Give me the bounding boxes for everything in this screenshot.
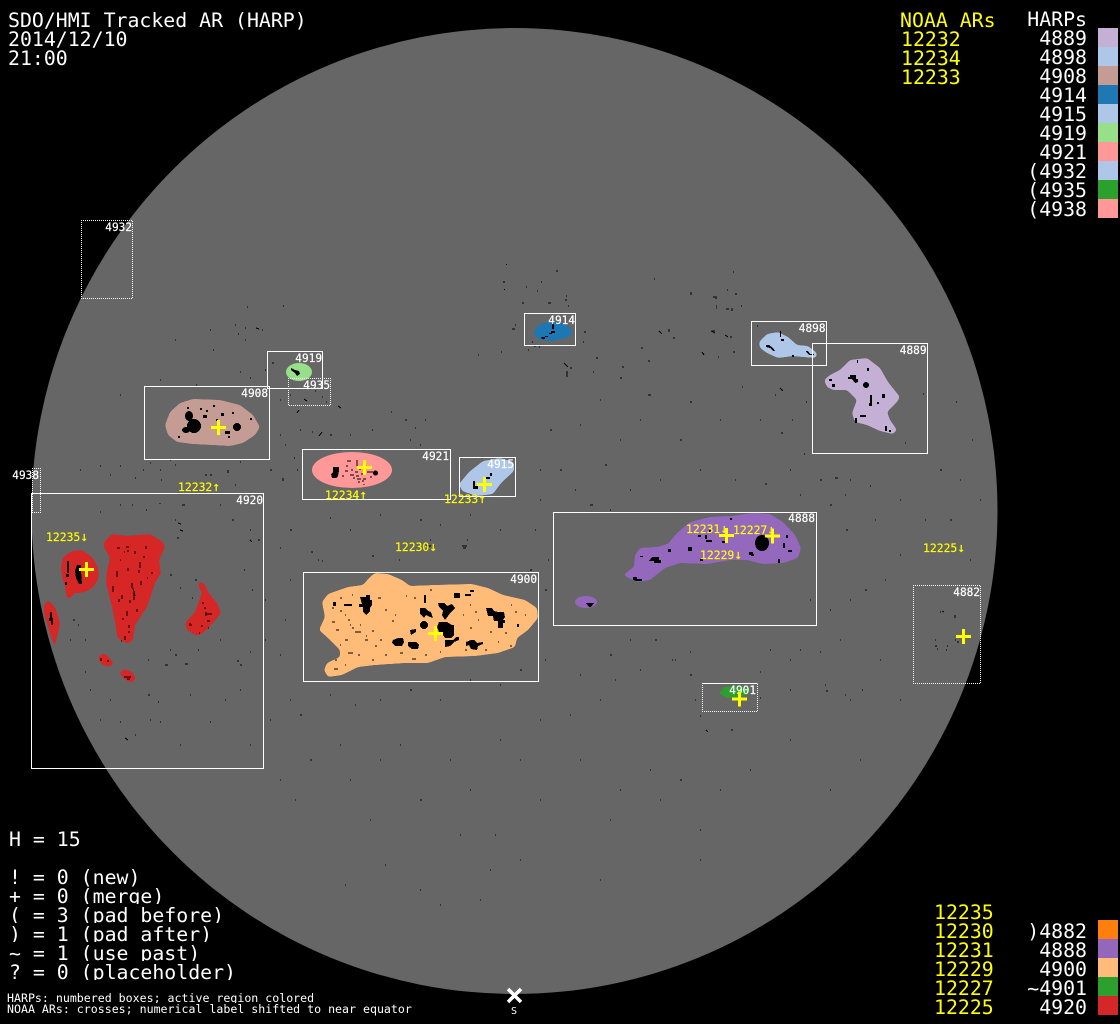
panel: HARP 4919 bbox=[286, 363, 312, 381]
label: 4882: 4882 bbox=[953, 586, 980, 599]
bottom legend: HARPs: 4900 bbox=[1039, 958, 1087, 981]
panel: HARP 4898 bbox=[759, 331, 817, 358]
box: HARP 4898 bbox=[752, 322, 826, 366]
bottom legend: NOAA ARs: 12230 bbox=[934, 920, 994, 943]
panel: HARP 4920 region bbox=[44, 534, 221, 683]
box: HARP 4938 bbox=[32, 468, 40, 512]
box: HARP 4935 bbox=[288, 378, 330, 406]
NOAA AR label: 12231: 12231↓ bbox=[686, 522, 728, 537]
cross: AR in 4900 bbox=[428, 626, 443, 641]
NOAA AR label: 12235: 12235↓ bbox=[46, 530, 88, 545]
label: 4938: 4938 bbox=[12, 469, 39, 482]
NOAA AR label: 12225: 12225↓ bbox=[923, 541, 965, 556]
NOAA AR label: 12227: 12227↓ bbox=[733, 523, 775, 538]
box: HARP 4932 bbox=[82, 220, 132, 298]
label: 4921: 4921 bbox=[422, 450, 449, 463]
label: 4935: 4935 bbox=[303, 379, 330, 392]
top legend: HARPs: 4915 bbox=[1039, 103, 1087, 126]
cross: AR in 4908 bbox=[211, 420, 226, 435]
panel: HARP 4915 bbox=[459, 458, 514, 496]
title block: 2014/12/10 bbox=[8, 28, 127, 51]
box: HARP 4921 bbox=[302, 450, 450, 500]
panel: HARP 4914 bbox=[533, 322, 572, 341]
scattered magnetic specks bbox=[70, 264, 981, 905]
bottom legend: NOAA ARs: 12235 bbox=[934, 901, 994, 924]
label: 4901: 4901 bbox=[729, 684, 756, 697]
status flag counts: ( = 3 (pad before) bbox=[9, 904, 224, 927]
bottom legend: HARPs: ~4901 bbox=[1027, 977, 1087, 1000]
panel: HARP 4889 bbox=[824, 358, 900, 434]
box: HARP 4915 bbox=[460, 458, 516, 496]
NOAA AR label: 12230: 12230↓ bbox=[395, 540, 437, 555]
label: 4932: 4932 bbox=[105, 221, 132, 234]
box: HARP 4901 bbox=[702, 684, 758, 712]
bottom legend: NOAA ARs: 12229 bbox=[934, 958, 994, 981]
cross: AR in 4882 bbox=[956, 629, 971, 644]
top legend: HARPs: HARPs bbox=[1027, 8, 1087, 31]
box: HARP 4908 bbox=[144, 386, 270, 460]
footnote: HARPs: numbered boxes; active region colored bbox=[7, 991, 314, 1005]
label: 4900: 4900 bbox=[510, 573, 537, 586]
bottom legend: NOAA ARs: 12231 bbox=[934, 939, 994, 962]
top legend: HARPs: 4921 bbox=[1039, 141, 1087, 164]
bottom legend: HARPs bbox=[1027, 920, 1087, 1019]
label: 4889: 4889 bbox=[900, 344, 926, 357]
NOAA AR label: 12232: 12232↑ bbox=[178, 480, 220, 495]
footnote: NOAA ARs: crosses; numerical label shifted to near equator bbox=[7, 1002, 412, 1016]
bottom legend: HARPs: )4882 bbox=[1027, 920, 1087, 943]
label: 4888: 4888 bbox=[788, 512, 815, 525]
top legend: HARPs: 4889 bbox=[1039, 27, 1087, 50]
footnote bbox=[7, 991, 412, 1016]
box: HARP 4889 bbox=[812, 344, 928, 454]
label: 4908: 4908 bbox=[241, 387, 268, 400]
count: H = 15: H = 15 bbox=[9, 828, 81, 851]
cross: AR 12235 position bbox=[79, 562, 94, 577]
panel: HARP 4900 bbox=[319, 573, 538, 677]
title block: 21:00 bbox=[8, 47, 68, 70]
bottom legend: NOAA ARs bbox=[934, 901, 994, 1019]
top legend: HARPs: (4935 bbox=[1027, 179, 1087, 202]
top legend: HARPs: 4914 bbox=[1039, 84, 1087, 107]
box: HARP 4882 bbox=[914, 586, 980, 684]
label: S: S bbox=[511, 1006, 517, 1017]
red active region patches bbox=[44, 534, 221, 683]
bottom legend: HARPs: 4888 bbox=[1039, 939, 1087, 962]
cross: AR in 4901 bbox=[732, 692, 747, 706]
top legend: NOAA ARs: 12234 bbox=[901, 47, 961, 70]
bottom legend: NOAA ARs: 12225 bbox=[934, 996, 994, 1019]
status flag counts: + = 0 (merge) bbox=[9, 885, 164, 908]
top legend: HARPs: 4898 bbox=[1039, 46, 1087, 69]
cross: AR in 4915 bbox=[477, 477, 492, 492]
status flag counts: ? = 0 (placeholder) bbox=[9, 961, 236, 984]
top legend: NOAA ARs: 12232 bbox=[901, 28, 961, 51]
cross: AR 12227 position bbox=[765, 528, 780, 544]
box: HARP 4900 bbox=[304, 572, 538, 682]
top legend colour swatches bbox=[1098, 28, 1118, 218]
status flag counts bbox=[9, 866, 239, 986]
box: HARP 4888 bbox=[554, 512, 816, 626]
label: 4914: 4914 bbox=[548, 314, 575, 327]
panel: HARP 4888 bbox=[575, 513, 801, 608]
icon: south pole marker bbox=[508, 989, 521, 1002]
top legend: HARPs: (4932 bbox=[1027, 160, 1087, 183]
status flag counts: ) = 1 (pad after) bbox=[9, 923, 212, 946]
NOAA AR label: 12233: 12233↑ bbox=[444, 492, 486, 507]
label: 4898: 4898 bbox=[799, 322, 826, 335]
top legend: NOAA ARs: 12233 bbox=[901, 66, 961, 89]
bottom legend: HARPs: 4920 bbox=[1039, 996, 1087, 1019]
panel: HARP 4921 bbox=[312, 452, 392, 488]
NOAA AR label: 12234: 12234↑ bbox=[325, 488, 367, 503]
top legend: HARPs: (4938 bbox=[1027, 198, 1087, 221]
panel: HARP 4901 bbox=[719, 686, 750, 698]
bottom legend: NOAA ARs: 12227 bbox=[934, 977, 994, 1000]
top legend: HARPs: 4908 bbox=[1039, 65, 1087, 88]
bottom legend colour swatches bbox=[1098, 920, 1118, 1015]
box: HARP 4919 bbox=[268, 352, 322, 388]
title block: SDO/HMI Tracked AR (HARP) bbox=[8, 9, 307, 32]
top legend: NOAA ARs bbox=[900, 9, 996, 89]
title block bbox=[8, 9, 307, 70]
cross: AR 12231 position bbox=[719, 528, 734, 543]
label: 4919: 4919 bbox=[295, 352, 322, 365]
top legend: HARPs bbox=[1027, 8, 1087, 221]
panel: HARP 4908 bbox=[165, 399, 260, 446]
NOAA AR label: 12229: 12229↓ bbox=[700, 548, 742, 563]
box: HARP 4914 bbox=[524, 314, 576, 346]
top legend: HARPs: 4919 bbox=[1039, 122, 1087, 145]
top legend: NOAA ARs: NOAA ARs bbox=[900, 9, 996, 32]
label: 4915: 4915 bbox=[487, 458, 514, 471]
cross: AR in 4921 bbox=[357, 460, 372, 475]
status flag counts: ! = 0 (new) bbox=[9, 866, 140, 889]
sunspots in 4920 bbox=[49, 561, 82, 625]
box: HARP 4920 bbox=[32, 494, 264, 768]
status flag counts: ~ = 1 (use past) bbox=[9, 942, 200, 965]
label: 4920: 4920 bbox=[236, 494, 263, 507]
